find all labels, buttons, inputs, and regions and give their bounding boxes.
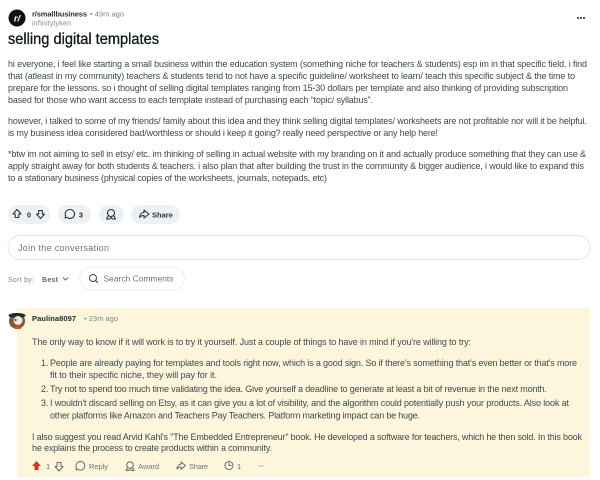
subreddit name: r/smallbusiness — [32, 10, 87, 18]
numbered list: 2. — [41, 384, 49, 394]
title: selling digital templates — [8, 31, 159, 48]
panel background — [17, 308, 590, 477]
icon: upvote arrow — [32, 461, 41, 470]
post header — [8, 10, 585, 28]
icon: subreddit avatar — [8, 10, 26, 26]
join conversation input — [8, 236, 590, 260]
sort control: Sort by: — [8, 277, 34, 284]
award button — [99, 205, 124, 224]
comment body: he explains the process to create products within a community. — [32, 443, 272, 453]
paragraph 3: apply straight away for both students & teachers. i also plan that after building the trust in the community & bigger audience, i would like to expand this — [8, 161, 584, 171]
numbered list: I wouldn't discard selling on Etsy, as it can give you a lot of visibility, and the algorithm could potentially push your products. Also look at — [50, 398, 569, 408]
timer action — [225, 462, 241, 471]
icon: more menu — [577, 17, 585, 19]
share action: Share — [189, 462, 208, 471]
upvote count: 1 — [46, 462, 50, 471]
numbered list: Try not to spend too much time validating the idea. Give yourself a deadline to generate at least a bit of revenue in the next month. — [50, 384, 547, 394]
paragraph 3: *btw im not aiming to sell in etsy/ etc. im thinking of selling in actual website with my branding on it and actually produce something that they can use & — [8, 149, 586, 159]
icon: subreddit avatar: r/ — [14, 14, 22, 24]
comment body: I also suggest you read Arvid Kahl's "The Embedded Entrepreneur" book. He developed a software for teachers, which he then sold. In this book — [32, 432, 583, 442]
post body — [8, 59, 587, 183]
comments button — [58, 205, 91, 224]
post time: • 49m ago — [90, 10, 124, 18]
comments button: 3 — [79, 210, 83, 220]
comment action row — [32, 461, 264, 471]
numbered list: other platforms like Amazon and Teachers Pay Teachers. Platform marketing impact can be huge. — [50, 410, 420, 420]
author name: infinitylyken — [32, 20, 71, 28]
sort control: Best — [42, 277, 59, 284]
paragraph 2 — [8, 116, 587, 138]
search comments box: Search Comments — [104, 274, 174, 284]
paragraph 1 — [8, 59, 587, 105]
vote button — [8, 205, 50, 224]
numbered list: 1. — [41, 358, 49, 368]
numbered list: 3. — [41, 398, 49, 408]
paragraph 1: hi everyone, i feel like starting a small business within the education system (something niche for teachers & students) esp im in that specific field. i find — [8, 59, 587, 69]
timer action: 1 — [237, 462, 241, 471]
paragraph 1: that (atleast in my community) teachers & students tend to not have a specific guideline/ worksheet to learn/ teach this specific subject & the time to — [8, 71, 575, 81]
paragraph 3: to a stationary business (physical copies of the worksheets, journals, notepads, etc) — [8, 173, 327, 183]
award action: Award — [138, 462, 159, 471]
reply action — [76, 461, 108, 471]
sort control — [8, 277, 68, 284]
comment body — [32, 337, 583, 453]
numbered list: fit to their specific niche, they will pay for it. — [50, 370, 217, 380]
paragraph 1: prepare for the lessons. so i thought of selling digital templates ranging from 15-30 dollars per template and also thinking of providing subscription — [8, 83, 568, 93]
icon: downvote arrow — [55, 462, 63, 471]
paragraph 1: based for those who want access to each template instead of purchasing each “topic/ syllabus”. — [8, 95, 373, 105]
share button: Share — [152, 210, 173, 220]
icon: commenter avatar — [8, 313, 26, 329]
comment body: The only way to know if it will work is to try it yourself. Just a couple of things to have in mind if you're willing to try: — [32, 337, 471, 347]
comment panel — [8, 308, 590, 477]
numbered list: People are already paying for templates and tools right now, which is a good sign. So if there's something that's even better or that's more — [50, 358, 577, 368]
icon: comment more menu — [258, 465, 264, 467]
paragraph 3 — [8, 149, 586, 183]
share button — [131, 205, 180, 224]
join conversation input: Join the conversation — [18, 243, 109, 253]
paragraph 2: however, i talked to some of my friends/ family about this idea and they think selling digital templates/ worksheets are not profitable nor will it be helpful. — [8, 116, 587, 126]
post action buttons — [8, 205, 180, 224]
award action — [126, 462, 159, 471]
comment time: • 23m ago — [84, 314, 118, 323]
share action — [177, 462, 208, 471]
reply action: Reply — [89, 462, 108, 471]
paragraph 2: is my business idea considered bad/worthless or should i keep it going? really need perspective or any help here! — [8, 128, 438, 138]
numbered list — [41, 358, 577, 420]
search comments box — [80, 267, 184, 290]
vote button: 0 — [27, 210, 31, 220]
commenter name: Paulina8097 — [32, 314, 76, 323]
